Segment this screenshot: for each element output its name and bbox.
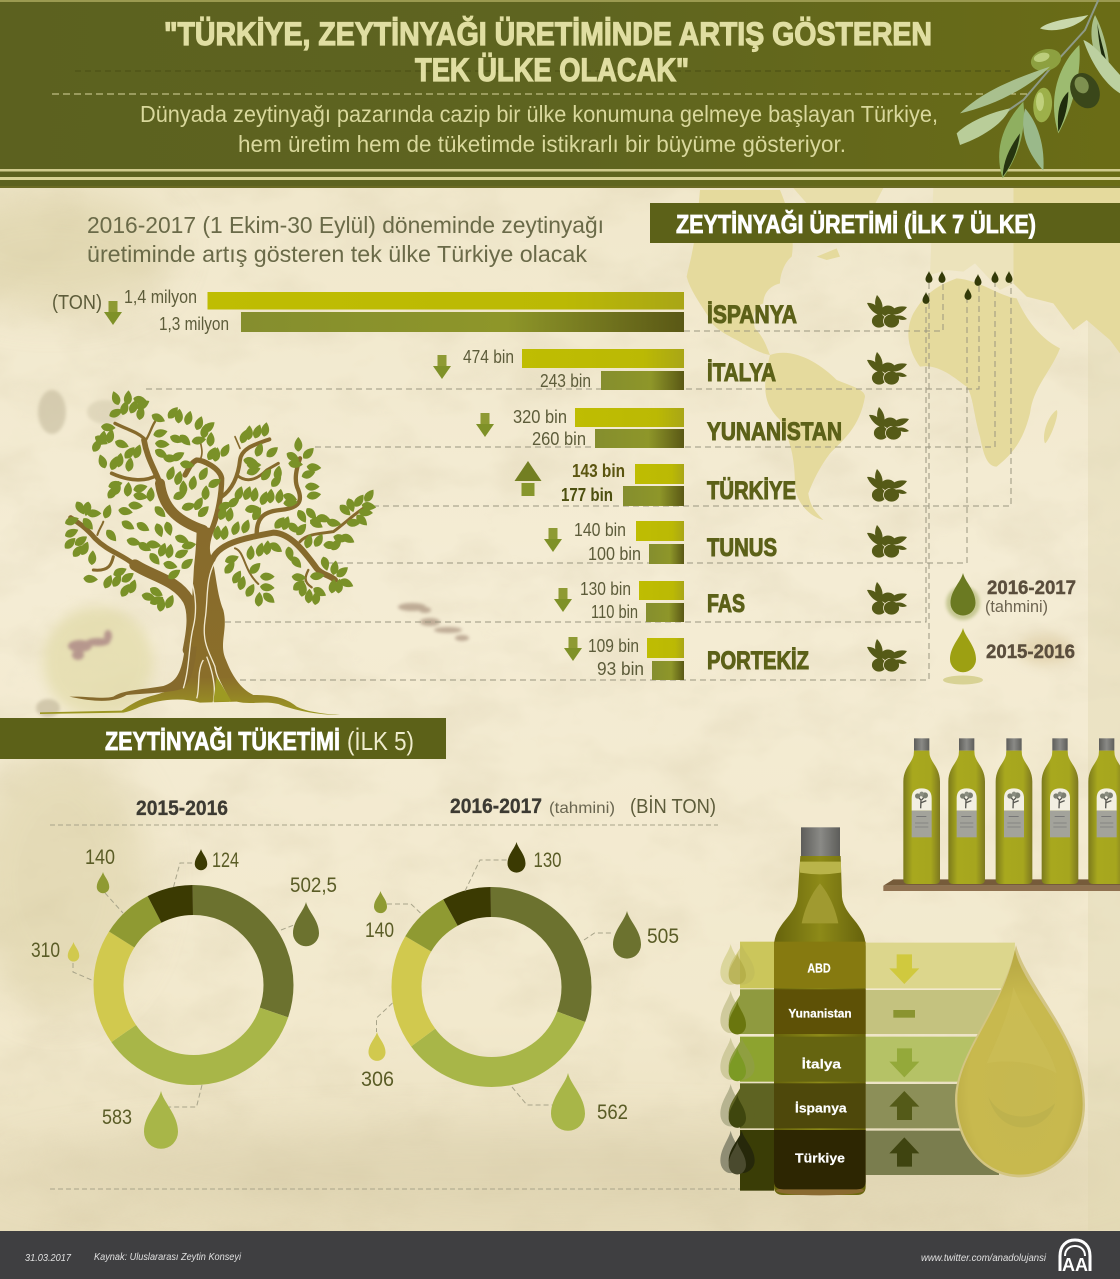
intro text [140, 101, 938, 157]
donut labels: 2015-2016: 583 [102, 1106, 132, 1129]
row: İspanya: İSPANYA [707, 301, 797, 329]
heading: consumption [0, 718, 446, 759]
donut labels: 2015-2016: 502,5 [290, 874, 337, 897]
right bands [866, 943, 1015, 1175]
row: Türkiye: 177 bin [561, 485, 613, 505]
large oil drop [955, 945, 1085, 1177]
intro text: Dünyada zeytinyağı pazarında cazip bir ülke konumuna gelmeye başlayan Türkiye, [140, 101, 938, 127]
row: Tunus: TUNUS [707, 534, 777, 562]
title [164, 16, 932, 88]
donut labels: 2016-2017: 306 [361, 1068, 394, 1091]
chart headings: 2016-2017 [450, 795, 542, 818]
icon: olive branch [957, 0, 1120, 178]
chart headings: (tahmini) [549, 800, 615, 817]
legend [943, 573, 1076, 684]
legend: 2015-2016 [986, 642, 1075, 663]
row: İspanya: 1,4 milyon [124, 287, 197, 307]
header band [0, 0, 1120, 188]
bottles on shelf [883, 738, 1120, 891]
row: Türkiye: 143 bin [572, 461, 625, 481]
row: Yunanistan: YUNANİSTAN [707, 418, 842, 446]
icon: AA logo: AA [1062, 1255, 1088, 1275]
production subtitle: 2016-2017 (1 Ekim-30 Eylül) döneminde zeytinyağı [87, 212, 604, 238]
left bands [740, 942, 774, 1191]
donut labels: 2016-2017: 140 [365, 919, 394, 942]
row: Türkiye [514, 461, 907, 506]
legend: (tahmini) [985, 597, 1048, 616]
connector lines [146, 281, 1011, 680]
chart headings [50, 795, 718, 825]
donut labels: 2015-2016: 310 [31, 939, 60, 962]
row: Fas: 130 bin [580, 579, 631, 599]
bar chart: production [104, 287, 909, 680]
donut labels: 2016-2017: 562 [597, 1101, 628, 1124]
row: İtalya: İTALYA [707, 359, 776, 387]
title: "TÜRKİYE, ZEYTİNYAĞI ÜRETİMİNDE ARTIŞ GÖSTEREN [164, 16, 932, 52]
bottle [774, 827, 866, 1195]
donut labels: 2016-2017: 130 [534, 849, 562, 872]
donut labels: 2016-2017: 505 [647, 925, 679, 948]
row: İspanya: 1,3 milyon [159, 314, 229, 334]
consumption ranking with bottle [720, 827, 1085, 1195]
row: İspanya [104, 287, 907, 334]
heading: consumption: (İLK 5) [347, 726, 414, 756]
intro text: hem üretim hem de tüketimde istikrarlı bir büyüme gösteriyor. [238, 131, 846, 157]
bottle: İtalya [802, 1057, 842, 1072]
trend arrows [889, 954, 919, 1167]
row: İtalya: 474 bin [463, 347, 514, 367]
donut labels: 2015-2016: 124 [212, 849, 239, 872]
production subtitle [87, 212, 604, 267]
row: Tunus: 140 bin [574, 520, 626, 540]
footer: www.twitter.com/anadolujansi [921, 1253, 1047, 1264]
row: Portekiz: 109 bin [588, 636, 639, 656]
donut labels: 2015-2016 [31, 846, 337, 1149]
world map [687, 188, 1120, 520]
row: Yunanistan: 260 bin [532, 429, 586, 449]
bottle: ABD [807, 960, 831, 975]
row: Tunus: 100 bin [588, 544, 641, 564]
row: Portekiz [564, 636, 907, 680]
row: Fas [554, 579, 907, 622]
divider [50, 1188, 742, 1190]
row: Yunanistan: 320 bin [513, 407, 567, 427]
row: Tunus [544, 520, 907, 564]
row: Fas: 110 bin [591, 602, 638, 622]
icon: olive tree [40, 390, 377, 715]
heading: consumption: ZEYTİNYAĞI TÜKETİMİ [105, 726, 340, 756]
row: Fas: FAS [707, 590, 745, 618]
side drops [720, 944, 755, 1175]
icon: AA logo [1060, 1240, 1090, 1275]
bottle: Türkiye [795, 1151, 845, 1166]
donut labels: 2015-2016: 140 [85, 846, 115, 869]
chart headings: (BİN TON) [630, 795, 716, 818]
production subtitle: üretiminde artış gösteren tek ülke Türkiye olacak [87, 241, 588, 267]
footer: 31.03.2017 [25, 1253, 71, 1264]
row: Türkiye: TÜRKİYE [707, 476, 796, 505]
row: İtalya: 243 bin [540, 371, 591, 391]
heading: production [650, 203, 1120, 243]
donut chart: 2015-2016 [108, 900, 278, 1070]
row: İtalya [433, 347, 907, 391]
row: Portekiz: 93 bin [597, 659, 644, 679]
footer: Kaynak: Uluslararası Zeytin Konseyi [94, 1252, 242, 1263]
row: Yunanistan [476, 407, 909, 449]
unit label: (TON) [52, 292, 102, 314]
heading: production: ZEYTİNYAĞI ÜRETİMİ (İLK 7 ÜLKE) [676, 209, 1036, 239]
bottle: İspanya [795, 1101, 847, 1116]
donut labels: 2016-2017 [361, 842, 679, 1131]
donut chart: 2016-2017 [406, 902, 576, 1072]
legend: 2016-2017 [987, 578, 1076, 599]
bottle: Yunanistan [788, 1007, 852, 1021]
row: Portekiz: PORTEKİZ [707, 647, 809, 675]
chart headings: 2015-2016 [136, 797, 228, 820]
footer [0, 1231, 1120, 1279]
title: TEK ÜLKE OLACAK" [415, 52, 689, 88]
map markers [922, 271, 1012, 304]
